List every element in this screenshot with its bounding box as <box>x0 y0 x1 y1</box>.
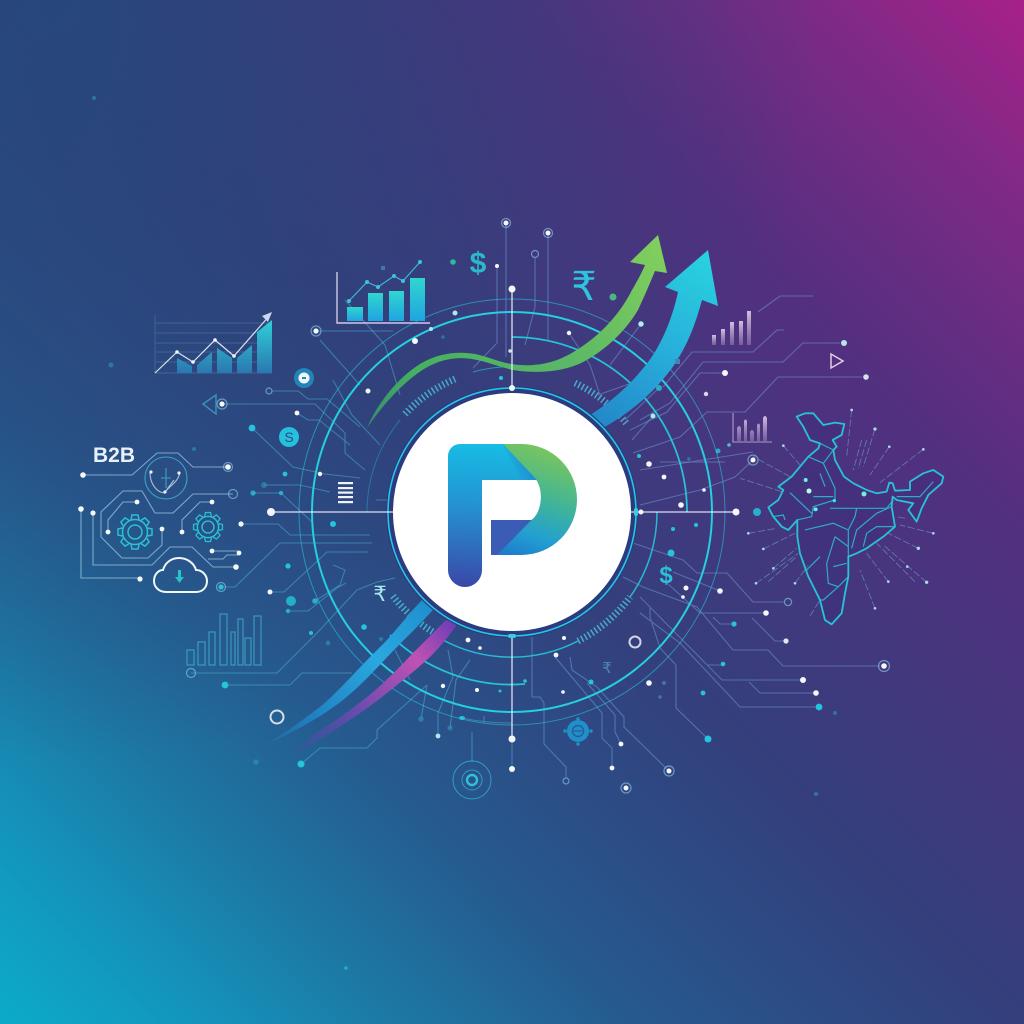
icon: play triangle <box>831 354 843 368</box>
icon: left triangle <box>203 395 216 414</box>
map outline <box>768 413 943 624</box>
tick arcs <box>393 379 630 641</box>
icon: coin badge <box>279 427 299 447</box>
blue tail <box>265 600 433 745</box>
logo stem <box>448 444 537 587</box>
crosshair lines <box>267 286 761 772</box>
central white circle with ring <box>386 386 638 638</box>
green growth arrow <box>367 235 667 428</box>
purple tail <box>287 619 458 757</box>
chart: small bars near map <box>733 413 772 442</box>
chart: bars and trend top <box>337 260 430 323</box>
map rays <box>740 410 933 616</box>
logo lower fold <box>491 520 534 555</box>
chart: rising bars left <box>155 312 272 373</box>
icon: coin badge: S <box>284 429 294 445</box>
cloud icon <box>154 558 207 592</box>
background specks <box>92 96 837 970</box>
currency symbols <box>373 247 673 677</box>
cluster circuit lines <box>81 453 239 578</box>
P logo <box>448 444 577 587</box>
rupee sign faint: ₹ <box>602 660 612 677</box>
concentric rings <box>299 299 725 725</box>
logo bowl <box>497 444 577 555</box>
dollar sign lower right: $ <box>659 562 673 589</box>
logo fold shadow <box>503 444 537 480</box>
icon: gear badge lower <box>563 717 593 746</box>
rupee sign lower left: ₹ <box>373 583 387 606</box>
circuit lines: right <box>473 223 880 777</box>
icon: list lines <box>338 482 353 503</box>
icon: target lower <box>453 761 491 799</box>
circuit lines: left <box>191 300 512 764</box>
blue growth arrow <box>590 250 718 428</box>
map state borders <box>773 443 933 600</box>
network dots <box>186 218 890 793</box>
icon: clock badge <box>294 368 314 388</box>
rupee sign top: ₹ <box>571 265 597 309</box>
India map <box>740 409 943 624</box>
dollar sign top: $ <box>470 247 487 280</box>
map ray tips <box>747 409 935 610</box>
B2B technology cluster <box>78 444 241 592</box>
chart: outlined bars lower left <box>187 614 261 665</box>
cluster nodes <box>80 472 86 478</box>
B2B label: B2B <box>93 444 135 467</box>
gauge icon <box>145 457 187 499</box>
chart: small bars top right <box>712 311 751 345</box>
map city dots <box>804 478 808 482</box>
small gear icon <box>194 513 222 541</box>
large gear icon <box>118 515 152 549</box>
arrow tails <box>265 600 458 757</box>
